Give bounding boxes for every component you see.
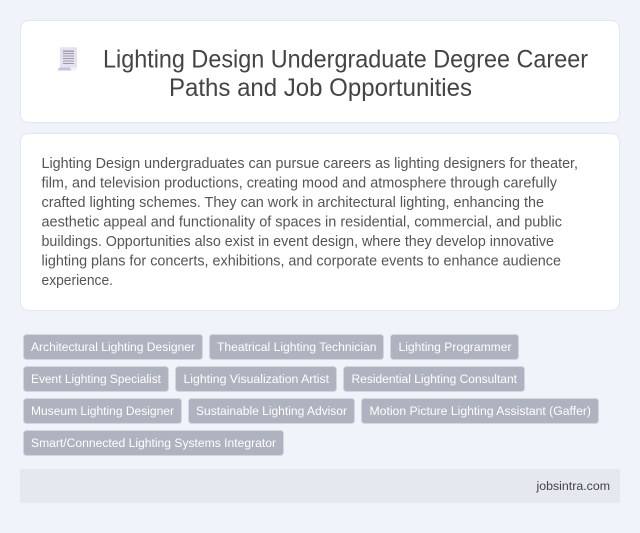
description text: experience. — [42, 273, 113, 289]
title: Paths and Job Opportunities — [169, 74, 472, 102]
footer bar — [20, 469, 620, 503]
description text: buildings. Opportunities also exist in event design, where they develop innovative — [42, 234, 554, 250]
tag: Lighting Visualization Artist: Lighting Visualization Artist — [184, 372, 330, 386]
description text: lighting plans for concerts, exhibitions, and corporate events to enhance audience — [42, 254, 561, 270]
title — [103, 46, 588, 102]
description text — [42, 156, 578, 289]
tag: Sustainable Lighting Advisor — [188, 398, 354, 424]
panel: description card — [20, 134, 620, 310]
tag: Museum Lighting Designer — [24, 398, 182, 424]
description text: Lighting Design undergraduates can pursue careers as lighting designers for theater, — [42, 156, 578, 172]
career tags — [24, 334, 598, 456]
icon: document scroll — [58, 47, 77, 70]
tag: Motion Picture Lighting Assistant (Gaffer): Motion Picture Lighting Assistant (Gaffer) — [370, 404, 591, 418]
tag: Event Lighting Specialist: Event Lighting Specialist — [31, 372, 162, 386]
description text: film, and television productions, creating mood and atmosphere through carefully — [42, 176, 558, 192]
tag: Sustainable Lighting Advisor: Sustainable Lighting Advisor — [196, 404, 347, 418]
tag: Theatrical Lighting Technician: Theatrical Lighting Technician — [217, 340, 376, 354]
tag: Lighting Programmer — [390, 334, 518, 360]
tag: Theatrical Lighting Technician — [210, 334, 384, 360]
panel: header card — [20, 20, 620, 122]
footer source text: jobsintra.com — [535, 479, 610, 493]
tag: Residential Lighting Consultant — [344, 366, 524, 392]
description text: crafted lighting schemes. They can work in architectural lighting, enhancing the — [42, 195, 544, 211]
description text: aesthetic appeal and functionality of spaces in residential, commercial, and public — [42, 214, 562, 230]
tag: Motion Picture Lighting Assistant (Gaffer) — [362, 398, 598, 424]
title: Lighting Design Undergraduate Degree Career — [103, 46, 588, 74]
tag: Residential Lighting Consultant: Residential Lighting Consultant — [352, 372, 518, 386]
tag: Architectural Lighting Designer — [24, 334, 202, 360]
tag: Architectural Lighting Designer: Architectural Lighting Designer — [31, 340, 195, 354]
tag: Smart/Connected Lighting Systems Integrator — [24, 430, 284, 456]
tag: Event Lighting Specialist — [24, 366, 168, 392]
tag: Lighting Programmer: Lighting Programmer — [398, 340, 512, 354]
tag: Museum Lighting Designer: Museum Lighting Designer — [31, 404, 174, 418]
tag: Lighting Visualization Artist — [176, 366, 336, 392]
tag: Smart/Connected Lighting Systems Integrator: Smart/Connected Lighting Systems Integrator — [31, 436, 276, 450]
